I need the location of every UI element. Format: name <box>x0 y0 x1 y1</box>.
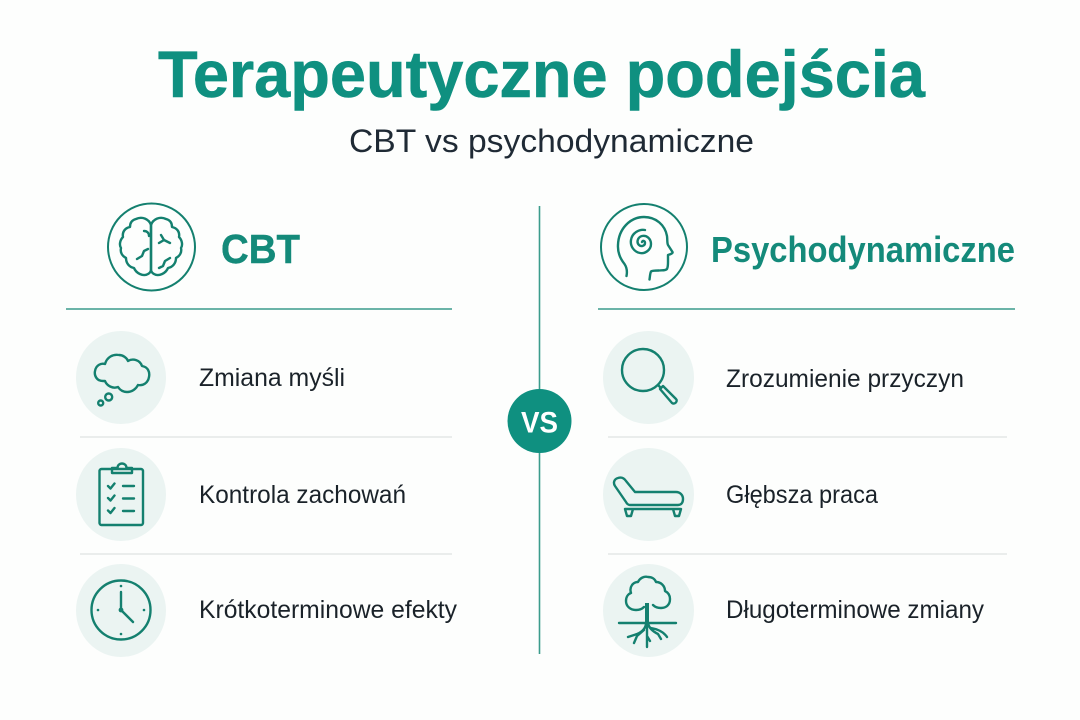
label: Kontrola zachowań <box>199 481 406 509</box>
item: Kontrola zachowań <box>76 448 406 541</box>
item: Głębsza praca <box>603 448 878 541</box>
VS badge <box>508 389 572 453</box>
icon: clipboard <box>76 448 166 541</box>
icon: tree with roots <box>603 564 694 657</box>
item: Zrozumienie przyczyn <box>603 331 964 424</box>
icon: thought cloud <box>76 331 166 424</box>
heading: CBT: CBT <box>221 226 300 272</box>
heading rule <box>66 308 452 310</box>
row rule <box>80 436 452 438</box>
icon: clock <box>76 564 166 657</box>
item: Zmiana myśli <box>76 331 345 424</box>
heading rule <box>598 308 1015 310</box>
icon: magnifier <box>603 331 694 424</box>
panel: CBT <box>66 204 457 657</box>
VS badge: VS <box>521 406 558 440</box>
heading: Psychodynamiczne: Psychodynamiczne <box>711 229 1015 270</box>
label: Długoterminowe zmiany <box>726 596 984 624</box>
item: Krótkoterminowe efekty <box>76 564 457 657</box>
label: Zmiana myśli <box>199 364 345 392</box>
item: Długoterminowe zmiany <box>603 564 984 657</box>
icon: chaise longue <box>603 448 694 541</box>
subtitle: CBT vs psychodynamiczne <box>349 123 754 159</box>
label: Krótkoterminowe efekty <box>199 596 457 624</box>
title: Terapeutyczne podejścia <box>158 37 926 111</box>
row rule <box>80 553 452 555</box>
icon: brain <box>108 204 195 290</box>
label: Głębsza praca <box>726 481 878 509</box>
row rule <box>608 553 1007 555</box>
panel: Psychodynamiczne <box>598 204 1015 657</box>
label: Zrozumienie przyczyn <box>726 365 964 393</box>
center divider <box>538 206 540 654</box>
row rule <box>608 436 1007 438</box>
icon: head with spiral <box>601 204 687 290</box>
